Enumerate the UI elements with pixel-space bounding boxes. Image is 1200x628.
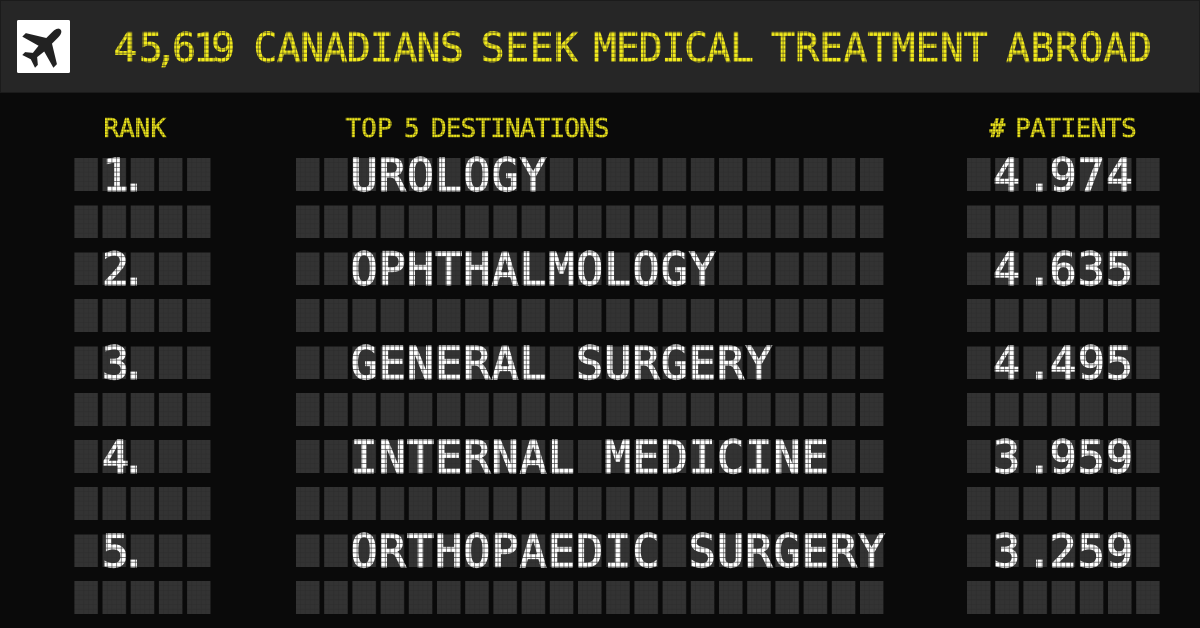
title: 45,619 — [114, 26, 235, 72]
column headings: TOP — [346, 114, 392, 144]
patient counts: 4.495 — [993, 337, 1134, 390]
column headings: PATIENTS — [1015, 114, 1136, 144]
rank values: 4. — [102, 431, 148, 484]
icon: airplane — [13, 14, 76, 77]
title: ABROAD — [1006, 26, 1152, 72]
patient counts: 3.959 — [993, 431, 1134, 484]
patient counts — [993, 149, 1134, 578]
destination names: UROLOGY — [350, 149, 548, 202]
panel: patient count cells — [967, 158, 1160, 614]
destination names: INTERNAL MEDICINE — [350, 431, 830, 484]
panel: destination cells — [296, 158, 884, 614]
rank values: 5. — [102, 525, 148, 578]
rank values: 2. — [102, 243, 148, 296]
rank values: 1. — [102, 149, 148, 202]
destination names: GENERAL SURGERY — [350, 337, 773, 390]
column headings — [105, 118, 1136, 138]
title — [115, 31, 1150, 68]
column headings: 5 — [404, 114, 420, 144]
patient counts: 4.974 — [993, 149, 1134, 202]
rank values — [104, 157, 137, 568]
destination names: ORTHOPAEDIC SURGERY — [350, 525, 886, 578]
header band — [0, 0, 1200, 92]
destination names — [350, 149, 886, 578]
destination names: OPHTHALMOLOGY — [350, 243, 717, 296]
column headings: # — [990, 114, 1006, 144]
column headings: DESTINATIONS — [431, 114, 609, 144]
title: MEDICAL — [593, 26, 753, 72]
panel: rank cells — [74, 158, 211, 614]
title: CANADIANS — [254, 26, 463, 72]
patient counts: 3.259 — [993, 525, 1134, 578]
title: SEEK — [480, 26, 578, 72]
rank values: 3. — [102, 337, 148, 390]
title: TREATMENT — [771, 26, 988, 72]
patient counts: 4.635 — [993, 243, 1134, 296]
column headings: RANK — [104, 114, 166, 144]
